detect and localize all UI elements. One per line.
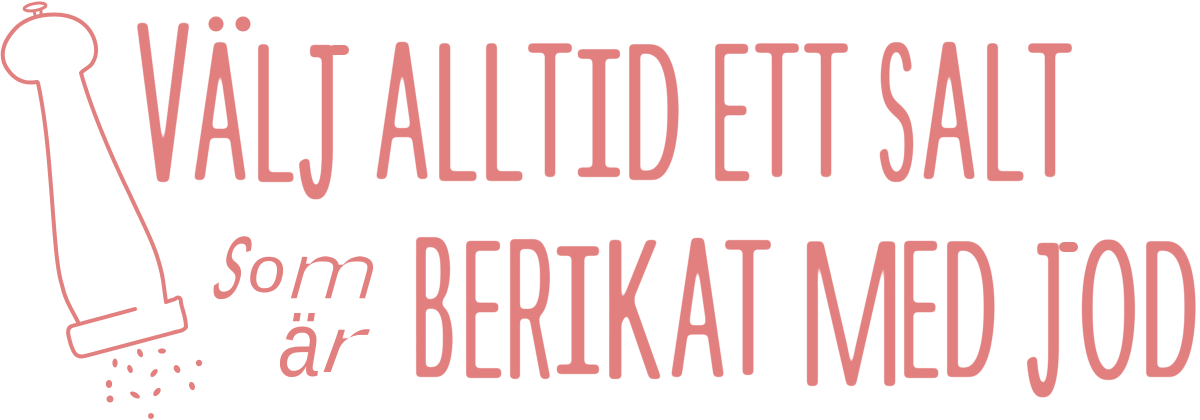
- word: ett: [713, 0, 847, 229]
- word: alltid: A: [377, 0, 427, 227]
- icon: falling salt grains: [106, 348, 202, 419]
- icon: pepper mill: [3, 2, 186, 357]
- word: Välj: Ä: [195, 0, 245, 228]
- word: alltid: L: [482, 0, 523, 229]
- word: berikat: A: [672, 189, 723, 420]
- word: med: E: [902, 194, 939, 420]
- script text: som: o: [248, 233, 285, 306]
- word: jod: O: [1080, 194, 1136, 420]
- word: alltid: T: [529, 0, 571, 224]
- word: salt: S: [879, 0, 914, 227]
- script text: är: [278, 293, 374, 396]
- word: alltid: D: [625, 0, 680, 227]
- heading: line two: [413, 189, 1197, 420]
- word: med: [796, 192, 996, 420]
- word: salt: T: [1029, 0, 1071, 224]
- heading: line one: [137, 22, 1072, 200]
- script text: som: [203, 193, 380, 323]
- letter details: Ä dots and J bars: [208, 16, 1073, 247]
- word: alltid: [377, 0, 680, 241]
- script text: är: ä: [278, 293, 320, 396]
- word: jod: D: [1142, 193, 1197, 420]
- word: berikat: T: [726, 193, 771, 420]
- word: alltid: L: [435, 0, 477, 229]
- word: ett: T: [805, 0, 847, 224]
- word: salt: [879, 0, 1071, 229]
- word: alltid: I: [570, 11, 628, 241]
- word: salt: L: [983, 0, 1024, 229]
- word: med: D: [943, 193, 996, 420]
- script text: som: s: [203, 193, 269, 323]
- word: Välj: J: [294, 1, 340, 273]
- word: jod: [1022, 193, 1197, 420]
- word: ett: T: [756, 0, 798, 224]
- word: berikat: [413, 189, 771, 420]
- script text: är: r: [318, 300, 374, 389]
- script text: som: m: [287, 228, 380, 315]
- word: salt: A: [924, 0, 974, 227]
- word: ett: E: [713, 0, 750, 229]
- word: Välj: L: [254, 0, 294, 231]
- word: Välj: [137, 22, 334, 200]
- word: berikat: B: [413, 190, 454, 420]
- word: berikat: E: [463, 194, 502, 420]
